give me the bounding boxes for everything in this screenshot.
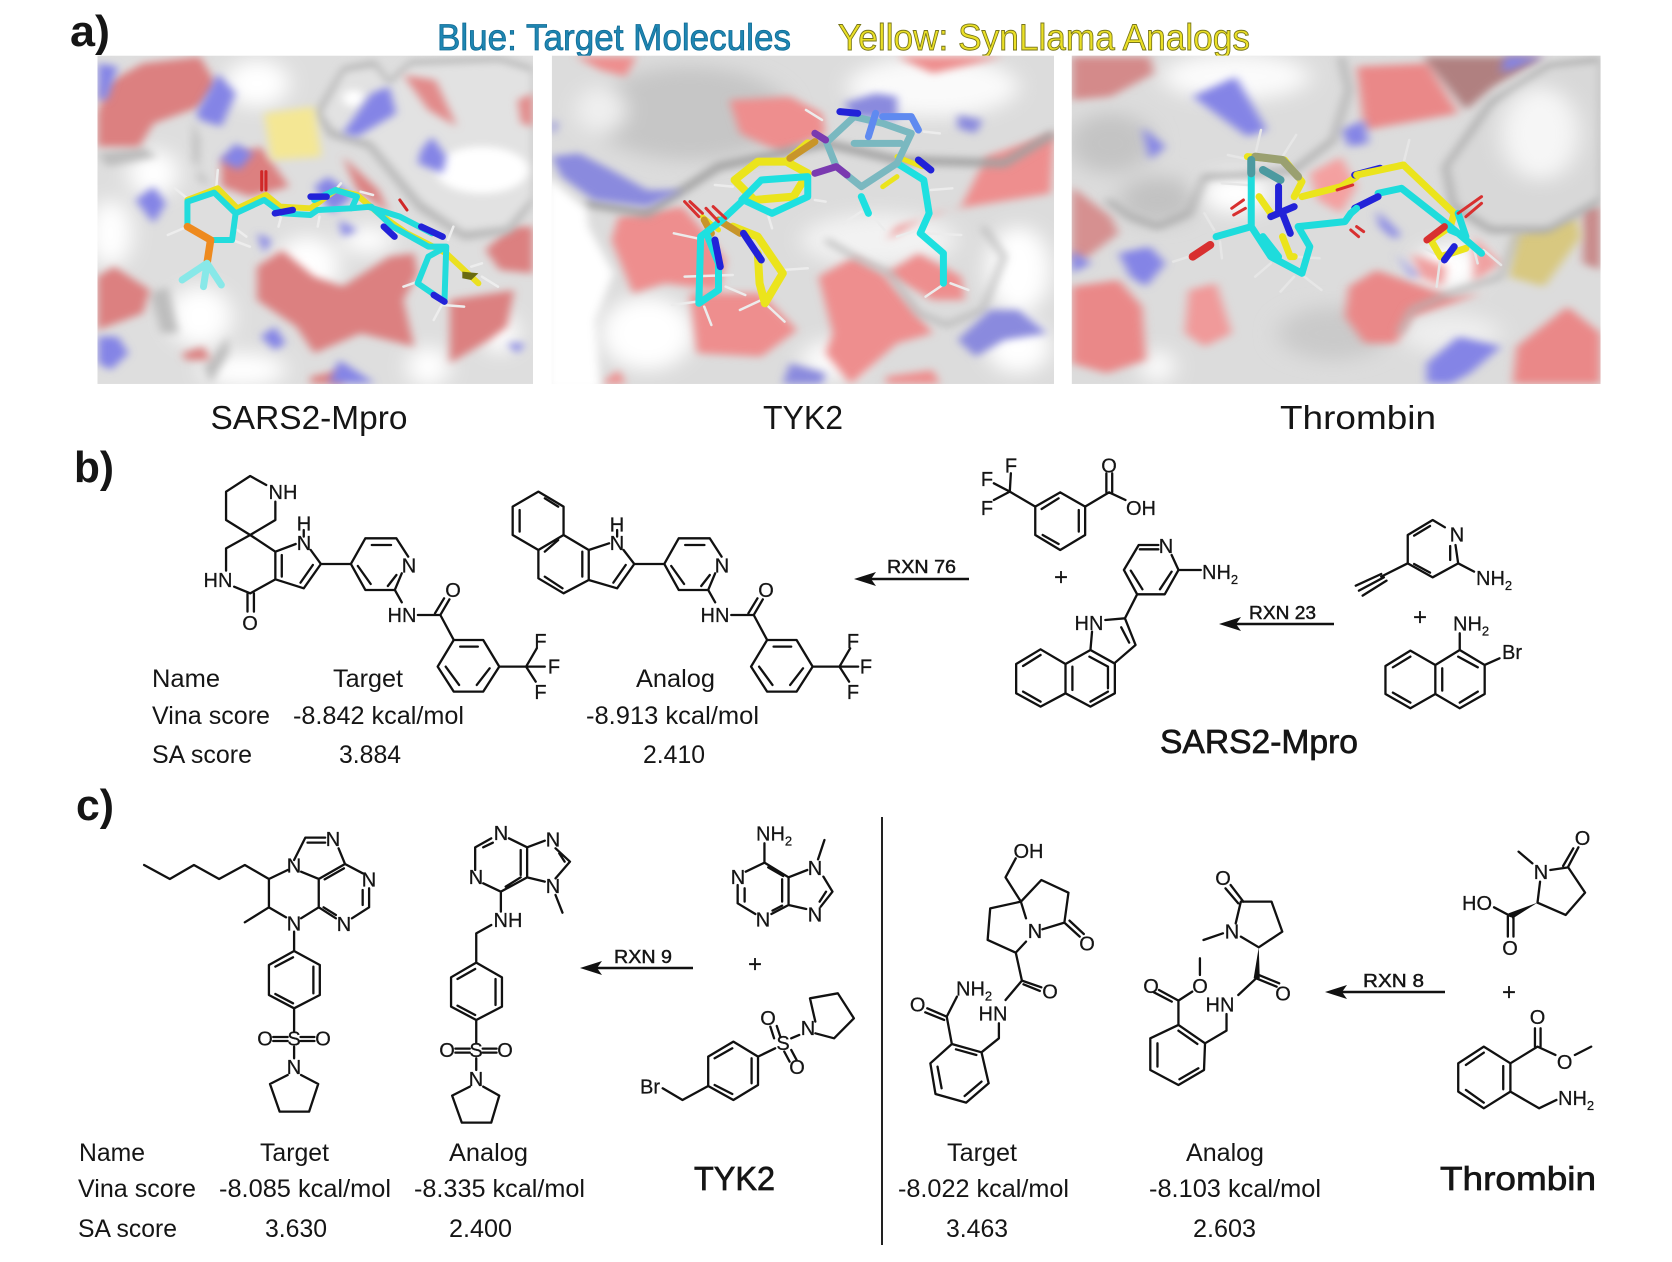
molecule: methyl aminomethyl benzoate: O — [1530, 1007, 1545, 1029]
arrow: RXN 8 — [1325, 971, 1445, 999]
molecule: N-methyl pyroglutamic acid: HO — [1462, 893, 1492, 915]
molecule: TYK2 analog: O — [439, 1040, 455, 1062]
table: SARS2-Mpro scores: -8.913 kcal/mol — [586, 702, 759, 730]
molecule: bromomethyl sulfonyl pyrrolidine: O — [760, 1008, 776, 1030]
molecule: SARS2-Mpro analog: N — [610, 533, 624, 555]
label c): c) — [76, 781, 114, 830]
plus sign: + — [1413, 604, 1427, 631]
molecule: SARS2-Mpro intermediate: HN — [1075, 613, 1103, 635]
molecule: methyl adenine: N — [756, 910, 770, 932]
table: SARS2-Mpro scores — [152, 665, 759, 769]
molecule: thrombin target: O — [910, 994, 925, 1016]
molecule: TYK2 analog: O — [497, 1040, 513, 1062]
molecule: SARS2-Mpro target: F — [548, 656, 560, 678]
arrow: RXN 76 — [854, 557, 969, 586]
label: Thrombin: Thrombin — [1280, 399, 1436, 436]
molecule: TYK2 analog: N — [546, 830, 560, 852]
molecule: SARS2-Mpro analog: H — [610, 514, 624, 536]
panel: Thrombin docking pose — [1068, 53, 1601, 384]
table: TYK2 scores: 2.400 — [449, 1215, 512, 1243]
molecule: TYK2 analog: N — [546, 876, 560, 898]
molecule: SARS2-Mpro intermediate: N — [1159, 536, 1173, 558]
molecule: SARS2-Mpro intermediate: 2 — [1231, 572, 1238, 587]
molecule: SARS2-Mpro intermediate: NH — [1202, 562, 1231, 584]
table: TYK2 scores: SA score — [78, 1215, 177, 1243]
molecule: methyl aminomethyl benzoate: O — [1557, 1052, 1572, 1074]
molecule: thrombin analog: O — [1215, 868, 1231, 890]
molecule: SARS2-Mpro target: HN — [388, 605, 416, 627]
arrow: RXN 8: RXN 8 — [1363, 971, 1424, 991]
table: Thrombin scores: 2.603 — [1193, 1215, 1256, 1243]
table: TYK2 scores — [78, 1139, 585, 1243]
molecule: thrombin target: O — [1079, 934, 1095, 956]
title: SARS2-Mpro: SARS2-Mpro — [1160, 723, 1358, 760]
molecule: thrombin target: NH — [956, 978, 985, 1000]
molecule: bromomethyl sulfonyl pyrrolidine: Br — [640, 1076, 660, 1098]
molecule: TYK2 analog — [439, 823, 570, 1123]
title: TYK2: TYK2 — [694, 1160, 775, 1197]
molecule: N-methyl pyroglutamic acid: O — [1502, 938, 1518, 960]
molecule: thrombin analog: O — [1143, 976, 1159, 998]
table: TYK2 scores: Name — [79, 1139, 145, 1167]
arrow: RXN 23 — [1219, 603, 1334, 631]
molecule: methyl aminomethyl benzoate — [1458, 1007, 1594, 1113]
table: SARS2-Mpro scores: 3.884 — [339, 741, 401, 769]
molecule: TYK2 target: N — [362, 870, 376, 892]
molecule: thrombin analog: O — [1192, 976, 1208, 998]
molecule: thrombin target: HN — [979, 1004, 1007, 1026]
molecule: methyl adenine: 2 — [785, 834, 792, 848]
molecule: N-methyl pyroglutamic acid — [1462, 828, 1590, 960]
title: Thrombin: Thrombin — [1440, 1160, 1596, 1197]
table: TYK2 scores: Target — [260, 1139, 329, 1167]
molecule: SARS2-Mpro analog: F — [860, 656, 872, 678]
molecule: N-methyl pyroglutamic acid: O — [1575, 828, 1590, 850]
plus sign: + — [748, 951, 762, 978]
molecule: bromomethyl sulfonyl pyrrolidine: N — [801, 1018, 815, 1040]
arrow: RXN 23: RXN 23 — [1249, 603, 1316, 623]
molecule: methyl adenine: N — [731, 867, 745, 889]
molecule: methyl adenine: N — [808, 858, 822, 880]
molecule: TYK2 target: N — [337, 914, 351, 936]
molecule: thrombin analog: N — [1225, 922, 1239, 944]
molecule: thrombin analog: O — [1275, 984, 1291, 1006]
molecule: thrombin analog — [1143, 868, 1291, 1085]
molecule: ethynyl aminopyridine: 2 — [1505, 578, 1512, 593]
molecule: ethynyl aminopyridine: N — [1450, 524, 1464, 546]
table: Thrombin scores: -8.103 kcal/mol — [1149, 1175, 1321, 1203]
molecule: TYK2 analog: N — [469, 867, 483, 889]
molecule: SARS2-Mpro intermediate — [1016, 536, 1238, 707]
molecule: thrombin target: OH — [1014, 841, 1044, 863]
label b): b) — [74, 443, 114, 492]
arrow: RXN 9: RXN 9 — [614, 947, 672, 967]
molecule: SARS2-Mpro target: NH — [269, 482, 297, 504]
molecule: TYK2 analog: N — [494, 823, 508, 845]
molecule: bromomethyl sulfonyl pyrrolidine — [640, 993, 854, 1100]
molecule: SARS2-Mpro analog: HN — [701, 605, 729, 627]
panel: SARS2-Mpro docking pose — [89, 56, 533, 387]
molecule: methyl adenine: NH — [756, 824, 785, 846]
label: TYK2: TYK2 — [763, 399, 843, 436]
molecule: methyl adenine — [731, 824, 832, 932]
molecule: SARS2-Mpro analog: F — [847, 631, 859, 653]
molecule: SARS2-Mpro analog: N — [715, 556, 729, 578]
molecule: thrombin target: 2 — [985, 988, 992, 1004]
molecule: trifluoromethyl benzoic acid: F — [981, 498, 993, 520]
table: Thrombin scores: Target — [947, 1139, 1017, 1167]
molecule: thrombin target — [910, 841, 1095, 1103]
molecule: SARS2-Mpro analog: F — [847, 682, 859, 704]
table: Thrombin scores: -8.022 kcal/mol — [898, 1175, 1069, 1203]
molecule: trifluoromethyl benzoic acid: O — [1101, 456, 1117, 478]
table: SARS2-Mpro scores: SA score — [152, 741, 252, 769]
label: SARS2-Mpro: SARS2-Mpro — [210, 399, 408, 436]
molecule: TYK2 target: N — [326, 829, 340, 851]
molecule: trifluoromethyl benzoic acid: F — [981, 469, 993, 491]
table: SARS2-Mpro scores: Vina score — [152, 702, 270, 730]
molecule: TYK2 target: N — [287, 914, 301, 936]
plus sign: + — [1502, 979, 1516, 1006]
table: Thrombin scores — [898, 1139, 1321, 1243]
molecule: TYK2 target: S — [287, 1028, 301, 1050]
arrow: RXN 9 — [580, 947, 693, 975]
molecule: SARS2-Mpro target: N — [297, 533, 311, 555]
molecule: TYK2 target: O — [257, 1028, 273, 1050]
molecule: SARS2-Mpro target: H — [297, 514, 311, 536]
molecule: SARS2-Mpro target: O — [445, 580, 461, 602]
molecule: bromomethyl sulfonyl pyrrolidine: S — [776, 1033, 790, 1055]
molecule: bromonaphthylamine: NH — [1453, 614, 1482, 636]
molecule: bromonaphthylamine — [1385, 614, 1522, 708]
molecule: trifluoromethyl benzoic acid — [981, 456, 1156, 550]
table: TYK2 scores: -8.335 kcal/mol — [414, 1175, 585, 1203]
table: TYK2 scores: 3.630 — [265, 1215, 327, 1243]
molecule: methyl aminomethyl benzoate: 2 — [1587, 1098, 1594, 1113]
molecule: SARS2-Mpro analog: O — [758, 580, 774, 602]
molecule: bromomethyl sulfonyl pyrrolidine: O — [789, 1057, 805, 1079]
molecule: SARS2-Mpro target — [204, 476, 560, 704]
molecule: bromonaphthylamine: 2 — [1482, 624, 1489, 638]
molecule: trifluoromethyl benzoic acid: F — [1005, 456, 1017, 478]
molecule: thrombin analog: HN — [1206, 994, 1234, 1016]
molecule: methyl adenine: N — [808, 904, 822, 926]
table: Thrombin scores: Analog — [1186, 1139, 1264, 1167]
molecule: SARS2-Mpro target: N — [402, 556, 416, 578]
molecule: SARS2-Mpro target: F — [534, 631, 547, 653]
panel: TYK2 docking pose — [547, 56, 1054, 390]
molecule: TYK2 target: N — [287, 856, 301, 878]
molecule: TYK2 analog: N — [469, 1069, 483, 1091]
table: Thrombin scores: 3.463 — [946, 1215, 1008, 1243]
molecule: TYK2 analog: NH — [494, 910, 522, 932]
molecule: bromonaphthylamine: Br — [1502, 642, 1522, 664]
molecule: N-methyl pyroglutamic acid: N — [1534, 862, 1548, 884]
legend: blue target molecules: Blue: Target Molecules — [437, 17, 791, 58]
table: SARS2-Mpro scores: 2.410 — [643, 741, 705, 769]
arrow: RXN 76: RXN 76 — [887, 557, 956, 577]
molecule: ethynyl aminopyridine: NH — [1476, 568, 1505, 590]
table: TYK2 scores: Analog — [449, 1139, 528, 1167]
table: TYK2 scores: -8.085 kcal/mol — [219, 1175, 391, 1203]
molecule: SARS2-Mpro target: F — [534, 682, 547, 704]
molecule: SARS2-Mpro analog — [513, 492, 872, 704]
molecule: thrombin target: N — [1028, 921, 1042, 943]
molecule: TYK2 target: N — [287, 1057, 301, 1079]
molecule: TYK2 target: O — [315, 1028, 331, 1050]
molecule: ethynyl aminopyridine — [1356, 520, 1512, 596]
table: SARS2-Mpro scores: Name — [152, 665, 220, 693]
molecule: SARS2-Mpro target: O — [242, 613, 258, 635]
table: SARS2-Mpro scores: Target — [333, 665, 403, 693]
label a): a) — [70, 7, 110, 56]
table: TYK2 scores: Vina score — [78, 1175, 196, 1203]
molecule: trifluoromethyl benzoic acid: OH — [1126, 498, 1156, 520]
molecule: methyl aminomethyl benzoate: NH — [1558, 1088, 1587, 1110]
molecule: TYK2 target — [144, 829, 376, 1112]
plus sign: + — [1054, 564, 1068, 591]
molecule: TYK2 analog: S — [469, 1040, 483, 1062]
table: SARS2-Mpro scores: -8.842 kcal/mol — [293, 702, 464, 730]
vertical divider — [881, 817, 883, 1245]
molecule: SARS2-Mpro target: HN — [204, 570, 232, 592]
molecule: thrombin target: O — [1042, 982, 1058, 1004]
table: SARS2-Mpro scores: Analog — [636, 665, 715, 693]
legend: yellow SynLlama analogs: Yellow: SynLlama Analogs — [838, 17, 1250, 58]
